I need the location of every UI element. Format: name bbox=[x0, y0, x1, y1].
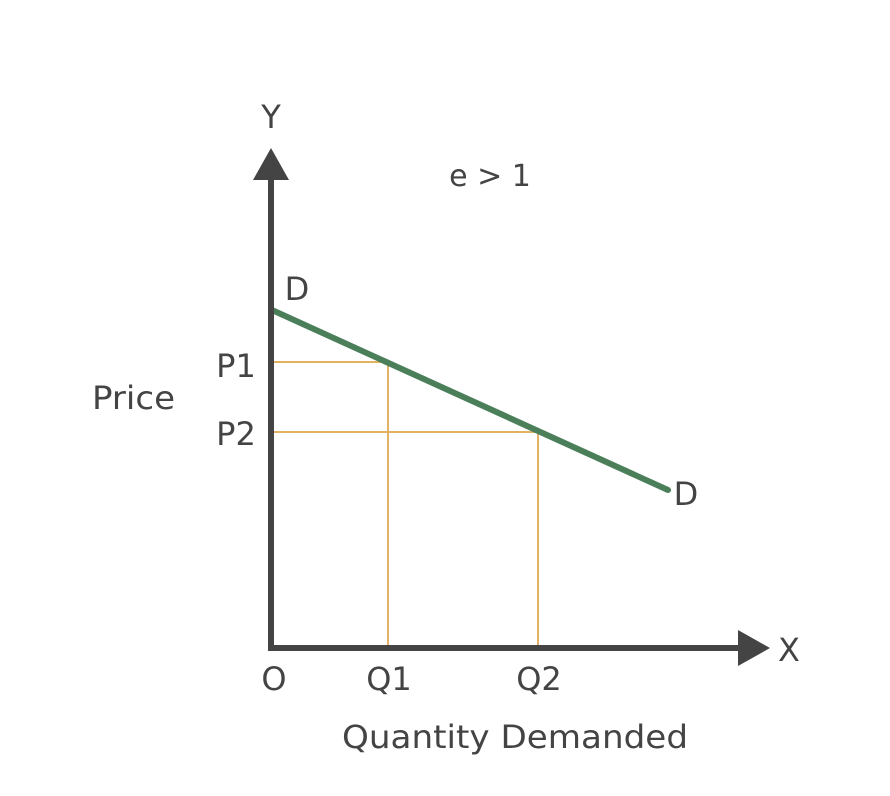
price labels: P2 bbox=[216, 415, 256, 453]
axis labels: Y bbox=[260, 98, 281, 136]
demand labels: D bbox=[285, 270, 309, 308]
price labels: P1 bbox=[216, 347, 256, 385]
elasticity label: e > 1 bbox=[449, 159, 531, 194]
quantity labels: Quantity Demanded bbox=[342, 718, 688, 756]
guide lines P2/Q2 bbox=[272, 432, 538, 648]
x axis with arrow bbox=[268, 630, 770, 666]
quantity labels: Q2 bbox=[516, 660, 562, 698]
axis labels: O bbox=[261, 660, 287, 698]
quantity labels bbox=[342, 660, 688, 756]
demand labels: D bbox=[674, 475, 698, 513]
demand labels bbox=[285, 270, 698, 513]
guide lines P1/Q1 bbox=[272, 362, 388, 648]
demand curve bbox=[272, 310, 668, 490]
quantity labels: Q1 bbox=[366, 660, 412, 698]
price labels bbox=[92, 347, 256, 453]
price labels: Price bbox=[92, 379, 175, 417]
axis labels bbox=[260, 98, 800, 698]
y axis with arrow bbox=[253, 148, 289, 651]
axis labels: X bbox=[778, 631, 800, 669]
